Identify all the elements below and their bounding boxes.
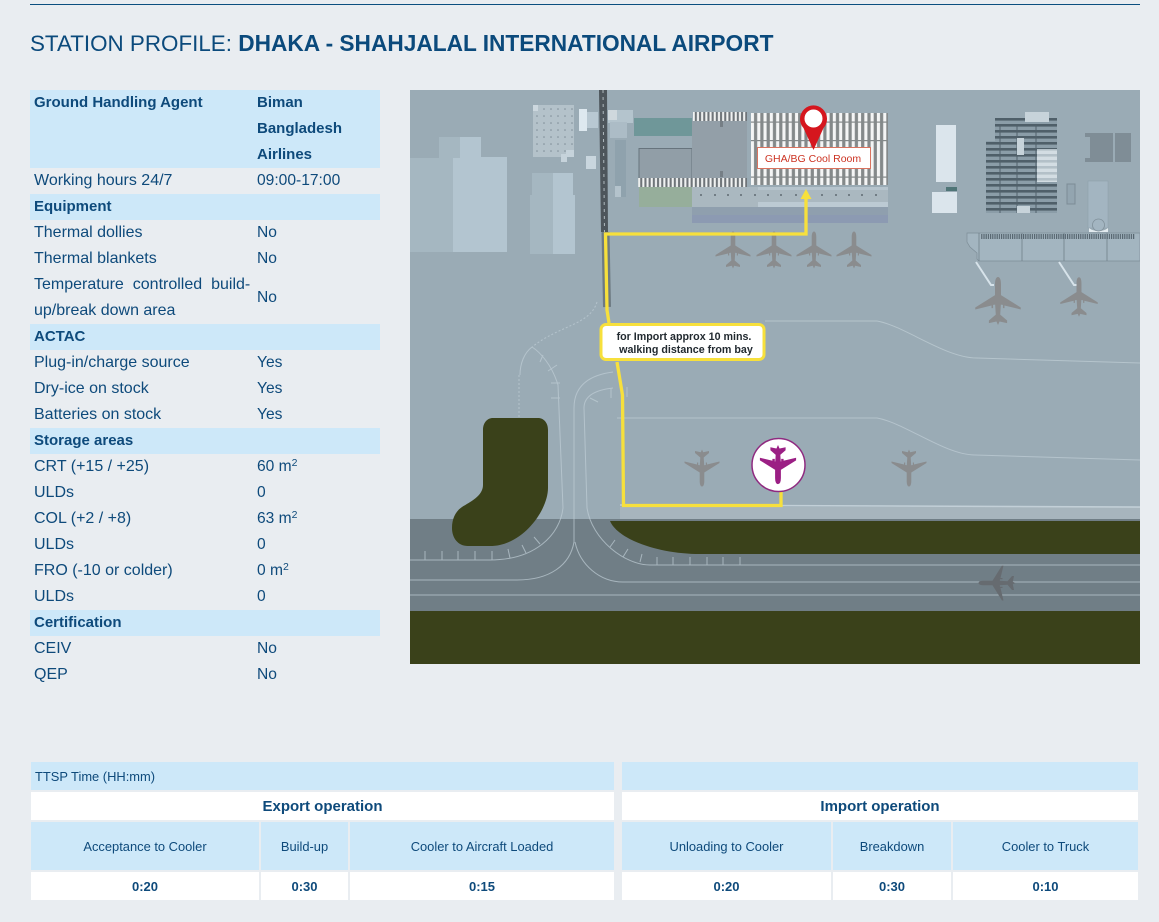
row: temperature controlled area: Temperature controlled build-: [34, 276, 250, 293]
row: thermal dollies: Thermal dollies: [34, 224, 142, 241]
export heading: Export operation: [262, 798, 382, 814]
row: working hours: Working hours 24/7: [34, 172, 172, 189]
panel: TTSP import operation: [622, 762, 1138, 900]
icon: location pin: [800, 105, 827, 150]
aircraft: stands south: [684, 450, 926, 486]
panel: TTSP export operation: [31, 762, 614, 900]
row: thermal dollies: No: [257, 224, 277, 241]
value: build-up: [261, 872, 348, 900]
grass strip middle: [610, 521, 1140, 554]
value: acceptance: 0:20: [132, 878, 158, 894]
column: breakdown: Breakdown: [860, 838, 924, 854]
buildings west: [410, 105, 633, 254]
grass blob left: [452, 418, 548, 546]
heading: equipment: Equipment: [34, 198, 112, 215]
taxiway band: [410, 519, 1140, 611]
row: COL ULDs: [34, 536, 266, 553]
row: ground handling agent: Biman: [257, 94, 303, 111]
taxi lines: [410, 302, 1140, 595]
row: QEP: QEP: [34, 666, 68, 683]
row: temperature controlled area: [34, 276, 277, 319]
row: ground handling agent: Ground Handling Agent: [34, 94, 203, 111]
row: batteries: [34, 406, 282, 423]
row: dry-ice: Dry-ice on stock: [34, 380, 149, 397]
heading: storage areas: [30, 428, 380, 454]
heading: ACTAC: [30, 324, 380, 350]
row: CEIV: CEIV: [34, 640, 71, 657]
callout: walking distance: for Import approx 10 mins.: [617, 331, 751, 343]
row: COL ULDs: ULDs: [34, 536, 74, 553]
row: plug-in source: Yes: [257, 354, 282, 371]
row: working hours: 09:00-17:00: [257, 172, 340, 189]
column: cooler to aircraft: [350, 822, 614, 870]
row: dry-ice: Yes: [257, 380, 282, 397]
row: FRO ULDs: 0: [257, 588, 266, 605]
export heading: [31, 792, 614, 820]
column: build-up: [261, 822, 348, 870]
aircraft: stands north: [716, 232, 1098, 325]
TTSP header: [31, 762, 614, 790]
row: ground handling agent: [30, 90, 380, 168]
top rule: [30, 4, 1140, 5]
row: FRO: 0 m2: [257, 561, 289, 579]
cargo terminal: [634, 112, 888, 223]
row: temperature controlled area: up/break down area: [34, 302, 175, 319]
column: cooler to truck: Cooler to Truck: [1002, 838, 1089, 854]
value: cooler to truck: [953, 872, 1138, 900]
column: unloading to cooler: Unloading to Cooler: [670, 838, 783, 854]
import heading: Import operation: [820, 798, 940, 814]
row: plug-in source: Plug-in/charge source: [34, 354, 190, 371]
row: FRO: [34, 561, 289, 579]
service road: [599, 90, 608, 307]
row: batteries: Yes: [257, 406, 282, 423]
row: COL: COL (+2 / +8): [34, 510, 131, 527]
row: FRO: FRO (-10 or colder): [34, 562, 173, 579]
row: CRT: [34, 457, 298, 475]
row: CRT: CRT (+15 / +25): [34, 458, 149, 475]
row: CRT ULDs: ULDs: [34, 484, 74, 501]
row: dry-ice: [34, 380, 282, 397]
value: unloading: 0:20: [713, 878, 740, 894]
column: acceptance to cooler: [31, 822, 259, 870]
row: QEP: [34, 666, 277, 683]
column: breakdown: [833, 822, 951, 870]
row: thermal blankets: No: [257, 250, 277, 267]
value: breakdown: 0:30: [879, 878, 905, 894]
panel: station information table: [30, 90, 380, 683]
icon: cool room label: [758, 148, 870, 168]
value: cooler to aircraft: [350, 872, 614, 900]
row: thermal blankets: [34, 250, 277, 267]
row: ground handling agent: Bangladesh: [257, 120, 342, 137]
row: plug-in source: [34, 354, 282, 371]
buildings east: [932, 112, 1131, 232]
row: COL: 63 m2: [257, 509, 298, 527]
jet bridges: [976, 262, 1077, 285]
column: build-up: Build-up: [281, 838, 328, 854]
icon: purple plane badge: [752, 438, 805, 492]
column: cooler to aircraft: Cooler to Aircraft Loaded: [411, 838, 553, 854]
value: breakdown: [833, 872, 951, 900]
value: unloading: [622, 872, 831, 900]
icon: cool room label: GHA/BG Cool Room: [765, 153, 861, 165]
row: batteries: Batteries on stock: [34, 406, 161, 423]
row: temperature controlled area: No: [257, 289, 277, 306]
route: yellow walking path: [606, 189, 812, 506]
column: cooler to truck: [953, 822, 1138, 870]
grass strip bottom: [410, 611, 1140, 664]
row: CEIV: [34, 640, 277, 657]
pier terminal: [967, 233, 1140, 261]
callout: walking distance: [601, 324, 764, 360]
callout: walking distance: walking distance from bay: [618, 344, 753, 356]
import header band: [622, 762, 1138, 790]
ground background: [410, 90, 1140, 664]
column: unloading to cooler: [622, 822, 831, 870]
heading: certification: [30, 610, 380, 636]
title: STATION PROFILE: DHAKA - SHAHJALAL INTERNATIONAL AIRPORT: [30, 30, 773, 56]
column: acceptance to cooler: Acceptance to Cooler: [83, 838, 207, 854]
row: FRO ULDs: ULDs: [34, 588, 74, 605]
row: thermal dollies: [34, 224, 277, 241]
row: COL ULDs: 0: [257, 536, 266, 553]
row: FRO ULDs: [34, 588, 266, 605]
value: cooler to truck: 0:10: [1032, 878, 1059, 894]
row: COL: [34, 509, 298, 527]
value: acceptance: [31, 872, 259, 900]
heading: equipment: [30, 194, 380, 220]
aircraft: runway: [978, 566, 1016, 600]
heading: certification: Certification: [34, 614, 122, 631]
row: CRT ULDs: 0: [257, 484, 266, 501]
row: CEIV: No: [257, 640, 277, 657]
row: ground handling agent: Airlines: [257, 146, 312, 163]
value: build-up: 0:30: [291, 878, 318, 894]
row: CRT: 60 m2: [257, 457, 298, 475]
airport map: [410, 90, 1140, 664]
apron edge band: [620, 507, 1140, 519]
row: thermal blankets: Thermal blankets: [34, 250, 157, 267]
import heading: [622, 792, 1138, 820]
heading: storage areas: Storage areas: [34, 432, 133, 449]
TTSP header: TTSP Time (HH:mm): [35, 768, 155, 784]
row: QEP: No: [257, 666, 277, 683]
value: cooler to aircraft: 0:15: [469, 878, 495, 894]
row: CRT ULDs: [34, 484, 266, 501]
row: working hours: [34, 172, 340, 189]
heading: ACTAC: ACTAC: [34, 328, 85, 345]
